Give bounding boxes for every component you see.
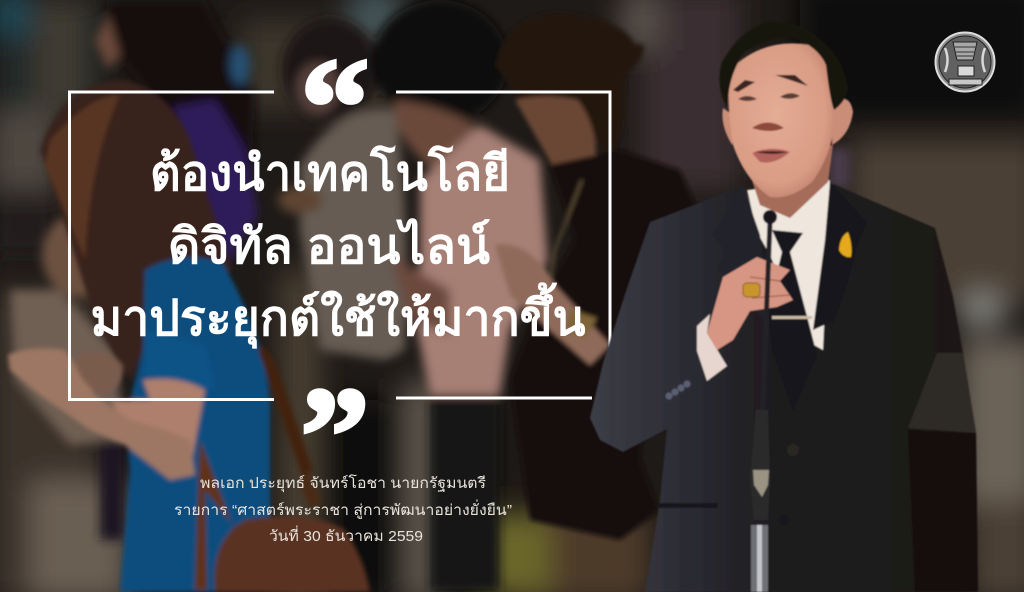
hand xyxy=(707,257,793,350)
gold ring xyxy=(743,283,760,297)
eyes xyxy=(738,93,800,101)
lapel pin xyxy=(839,232,852,257)
mouth xyxy=(752,149,790,163)
government seal emblem xyxy=(936,32,994,92)
opening quote mark: “ xyxy=(300,30,370,183)
suit jacket xyxy=(590,184,978,592)
jacket details xyxy=(658,503,718,508)
background right side xyxy=(800,0,1024,592)
attribution caption xyxy=(174,474,512,545)
eyebrows xyxy=(733,75,808,92)
woman in the left foreground xyxy=(8,0,370,592)
quote text: มาประยุกต์ใช้ให้มากขึ้น xyxy=(90,282,586,349)
quote text xyxy=(90,144,586,349)
black armband xyxy=(908,353,976,433)
sleeve buttons xyxy=(666,380,690,400)
shirt cuff xyxy=(697,314,727,381)
right lapel xyxy=(795,182,866,425)
quote text: ต้องนำเทคโนโลยี xyxy=(150,144,510,201)
portrait: speaker in dark suit xyxy=(590,22,978,592)
closing quote mark: ” xyxy=(300,359,370,512)
attribution caption: วันที่ 30 ธันวาคม 2559 xyxy=(269,525,423,545)
nose xyxy=(752,122,784,131)
ears xyxy=(722,99,853,145)
left lapel xyxy=(712,186,770,325)
quote frame xyxy=(70,92,610,400)
hair xyxy=(719,22,848,110)
face xyxy=(729,43,836,197)
neck xyxy=(747,145,833,218)
quote text: ดิจิทัล ออนไลน์ xyxy=(168,217,491,274)
standing people in the middle and right of the crowd xyxy=(278,0,700,592)
microphone stand xyxy=(760,222,770,470)
tie xyxy=(768,230,817,411)
shirt xyxy=(747,180,830,350)
attribution caption: พลเอก ประยุทธ์ จันทร์โอชา นายกรัฐมนตรี xyxy=(200,474,486,493)
attribution caption: รายการ “ศาสตร์พระราชา สู่การพัฒนาอย่างยั่งยืน” xyxy=(174,499,512,519)
